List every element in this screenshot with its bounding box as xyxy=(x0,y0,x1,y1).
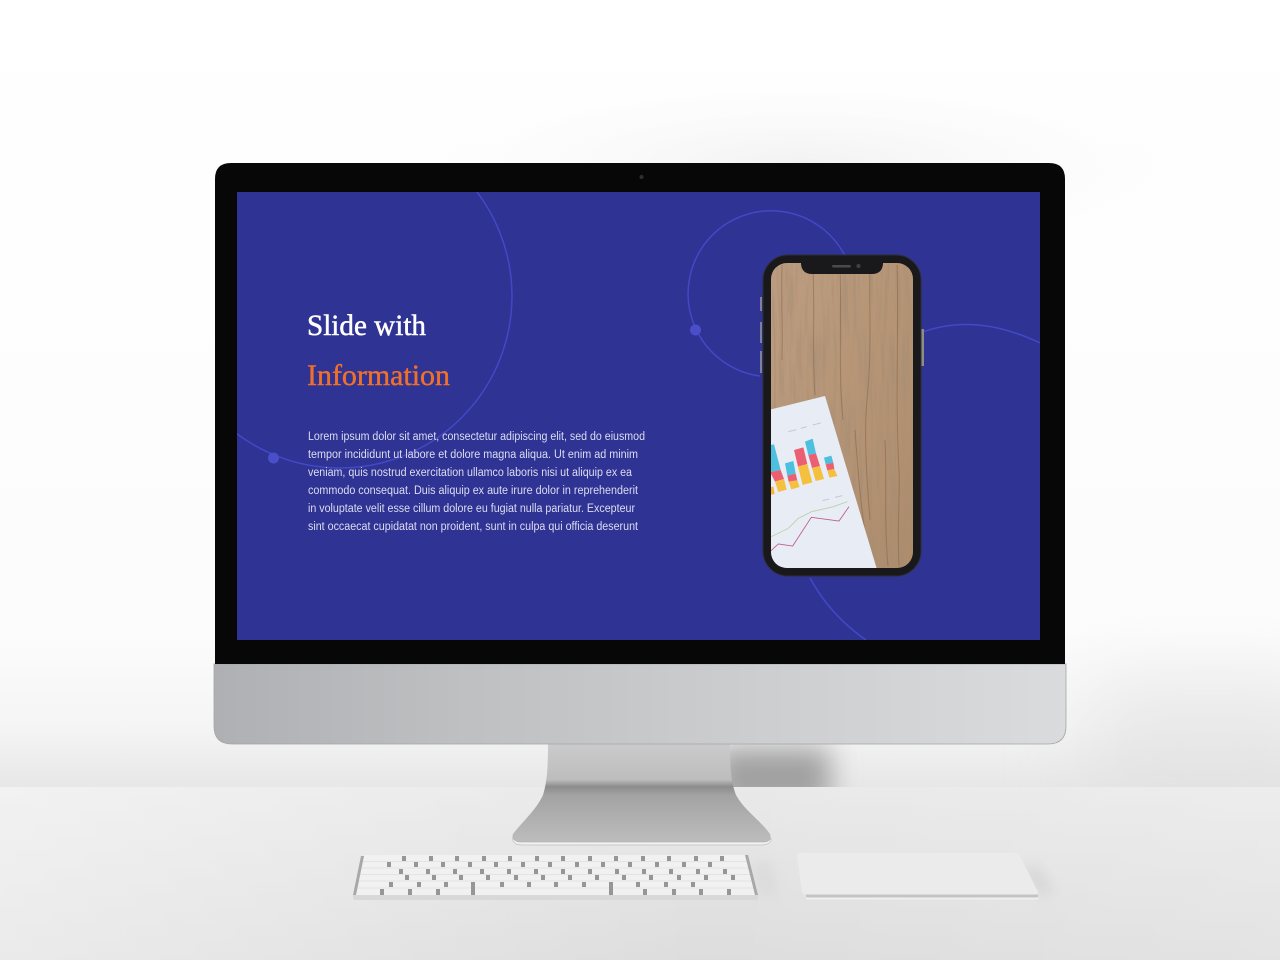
decorative arc lower xyxy=(810,578,866,640)
body paragraph: tempor incididunt ut labore et dolore magna aliqua. Ut enim ad minim xyxy=(308,449,638,461)
decorative circle left xyxy=(237,192,513,469)
phone speaker xyxy=(832,265,851,268)
monitor stand xyxy=(512,744,771,845)
wall shading right xyxy=(1115,688,1280,760)
phone side buttons xyxy=(760,297,762,373)
trackpad shadow xyxy=(1020,866,1056,895)
trackpad reflection xyxy=(806,898,1038,900)
phone screen photo xyxy=(770,263,913,568)
body paragraph: in voluptate velit esse cillum dolore eu fugiat nulla pariatur. Excepteur xyxy=(308,503,635,515)
title line one: Slide with xyxy=(307,309,426,342)
body paragraph xyxy=(308,431,645,533)
phone camera xyxy=(856,264,860,268)
wood grain lines xyxy=(782,265,899,566)
monitor bezel xyxy=(215,163,1065,664)
node dot left xyxy=(268,452,279,464)
keyboard row lines xyxy=(356,862,756,888)
monitor chin xyxy=(214,664,1066,744)
wood surface xyxy=(771,263,913,568)
node dot right xyxy=(690,324,701,336)
bar chart xyxy=(770,439,837,495)
chart legend marks xyxy=(788,423,842,501)
wall shadows xyxy=(730,688,1280,787)
wood fine grain xyxy=(771,263,913,568)
paper with charts xyxy=(770,396,877,568)
decorative circle right xyxy=(688,211,846,376)
trackpad front edge xyxy=(806,894,1038,898)
trackpad top xyxy=(797,853,1038,895)
stand shadow on wall xyxy=(730,744,846,787)
keyboard xyxy=(353,855,778,900)
body paragraph: Lorem ipsum dolor sit amet, consectetur adipiscing elit, sed do eiusmod xyxy=(308,431,645,443)
keyboard left and right edge xyxy=(353,855,758,895)
line chart xyxy=(770,502,849,552)
keyboard front edge xyxy=(353,895,758,900)
paper sheet xyxy=(770,396,877,568)
title xyxy=(307,309,450,392)
body paragraph: commodo consequat. Duis aliquip ex aute irure dolor in reprehenderit xyxy=(308,485,639,497)
body paragraph: sint occaecat cupidatat non proident, sunt in culpa qui officia deserunt xyxy=(308,521,639,533)
phone power button xyxy=(921,329,924,366)
webcam xyxy=(640,175,644,179)
slide screen xyxy=(237,192,1040,640)
phone notch xyxy=(801,262,883,274)
trackpad xyxy=(797,853,1056,900)
desk surface xyxy=(0,787,1280,960)
decorative arc upper right xyxy=(920,325,1040,343)
soft glow above monitor xyxy=(320,55,1280,275)
phone body xyxy=(763,255,921,576)
body paragraph: veniam, quis nostrud exercitation ullamco laboris nisi ut aliquip ex ea xyxy=(308,467,633,479)
title line two: Information xyxy=(307,359,450,392)
slide background xyxy=(237,192,1040,640)
keyboard body xyxy=(353,855,758,899)
key gaps xyxy=(380,856,735,895)
smartphone xyxy=(760,255,924,576)
keyboard shadow xyxy=(752,862,778,896)
